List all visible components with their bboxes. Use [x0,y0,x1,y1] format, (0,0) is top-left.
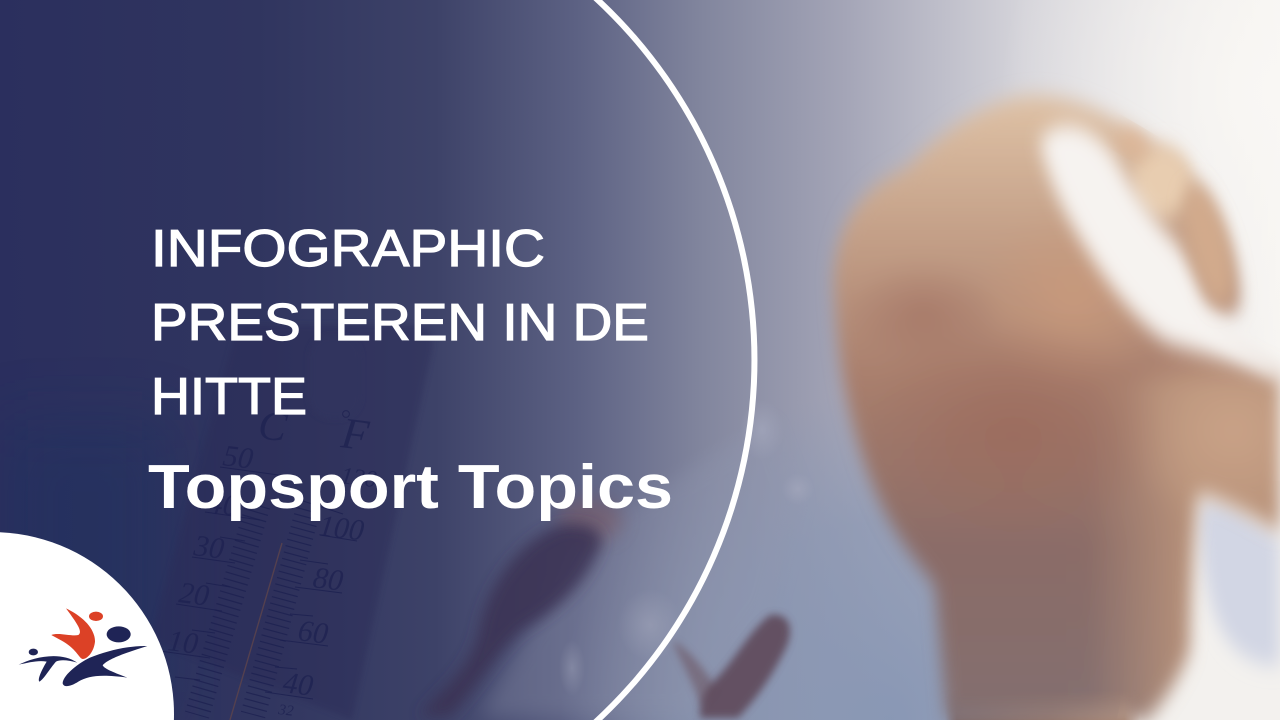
long ticks [160,467,357,699]
scale numbers: 20 [177,576,211,613]
bottle highlight [559,640,585,696]
bottle spot right [782,473,814,505]
circle outline [593,0,757,720]
dark blue lower-left corner [0,420,170,720]
skin base [820,85,1280,720]
title [151,220,649,426]
scale numbers: 40 [206,486,240,523]
title line 2: PRESTEREN IN DE [151,294,649,352]
navy small figure [19,656,77,682]
sky gap under the arm [1200,501,1280,666]
thermometer scale ticks left [197,505,258,715]
navy head small [29,649,38,655]
title line 1: INFOGRAPHIC [151,220,545,278]
red figure [51,608,95,659]
scale numbers: 60 [296,614,330,651]
head, arm and neck [820,85,1280,720]
bottle [480,420,800,716]
scale numbers: 80 [311,561,345,598]
scale numbers: 30 [191,529,226,566]
ear dark [880,280,968,338]
scale numbers: 120 [339,463,378,493]
title line 3: HITTE [151,368,307,426]
blurred hand with bottle [420,400,814,718]
finger [1175,178,1241,312]
bright gap between fingers [1040,126,1280,378]
cheek dark [944,366,1088,454]
bottle spot [618,589,682,661]
subtitle: Topsport Topics [148,453,673,522]
neck foot [947,701,1138,720]
temple warm [1018,274,1125,354]
thermometer body [150,325,432,720]
lower sky tint [560,390,1220,720]
scale numbers: 32 [277,702,295,720]
palm shadow [420,524,601,716]
bright shoulder area [1117,481,1280,720]
icon: logo figures [19,608,147,686]
forearm warm [1160,364,1275,484]
thermometer [150,325,432,720]
thermometer scale ticks right [253,510,308,715]
blurred person holding head [820,85,1280,720]
logo corner [0,532,174,720]
thermometer top hole [309,335,361,419]
scale numbers: 100 [317,509,366,547]
neck right side warm [1087,380,1280,720]
scale numbers: 40 [281,666,315,703]
red head [89,612,103,621]
palm glow [558,498,622,542]
thumb base [672,640,718,708]
finger knuckle [1124,135,1200,229]
scale numbers: 50 [221,439,255,476]
finger tip warm [1115,124,1152,160]
bottle spot upper [740,400,784,460]
scale numbers: 10 [166,624,200,661]
thumb [700,615,790,718]
mercury line [230,543,282,720]
navy head large [107,626,131,642]
scale numbers [166,439,378,720]
degree sign [343,411,349,417]
scale unit C: C [256,402,290,451]
scale unit F: F [338,408,373,460]
navy large figure [63,646,147,686]
bright sky glow top right [1000,0,1280,370]
